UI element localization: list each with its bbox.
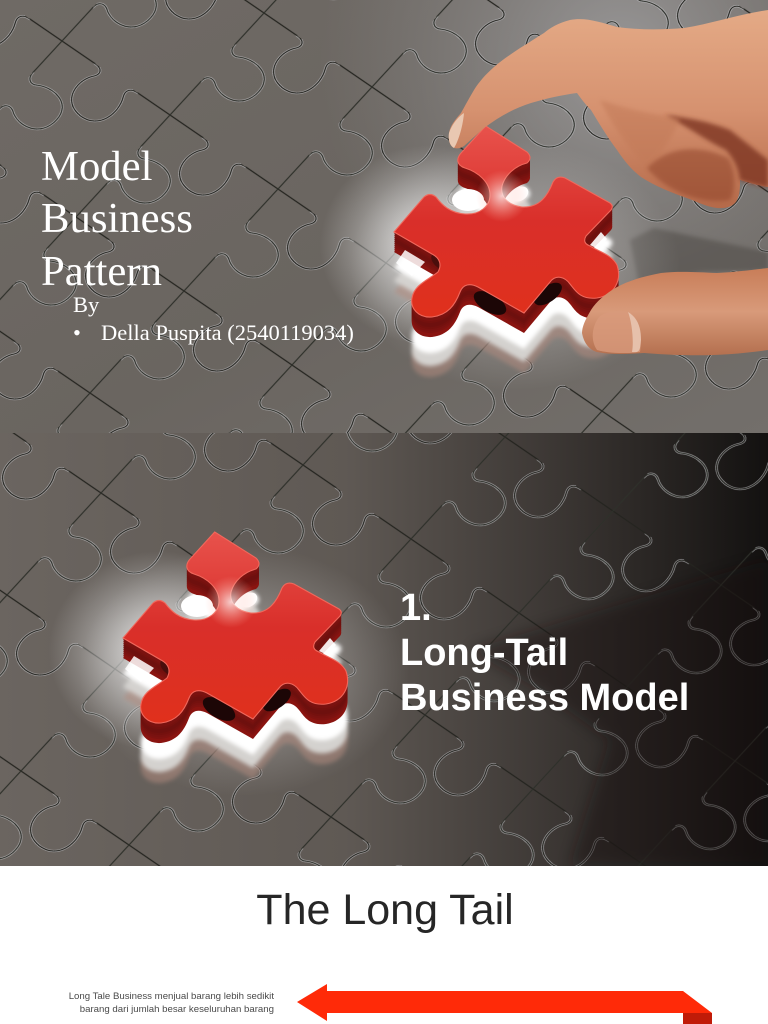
- top right light: [300, 0, 768, 433]
- title: The Long Tail: The Long Tail: [256, 886, 514, 934]
- dark shadow lower right: [470, 560, 768, 866]
- slide 2 background: [0, 433, 768, 866]
- panel: slide 3 The Long Tail: [0, 866, 768, 1024]
- icon: upper hand with finger: [449, 10, 768, 208]
- panel: slide 1 cover: [0, 0, 768, 433]
- heading: Long-Tail Business Model: Business Model: [400, 677, 689, 719]
- fingernail: [449, 113, 464, 148]
- description text: Long Tale Business menjual barang lebih sedikit: [69, 991, 274, 1002]
- title: Model Business Pattern: Pattern: [41, 248, 162, 295]
- title: Model Business Pattern: Model: [41, 143, 152, 190]
- puzzle lines slide 1: [0, 0, 768, 433]
- panel: slide 2 section heading: [0, 433, 768, 866]
- puzzle lines slide 2: [0, 433, 768, 866]
- thumbnail: [593, 311, 641, 353]
- byline: •: [73, 320, 81, 345]
- description text: barang dari jumlah besar keseluruhan barang: [80, 1004, 274, 1015]
- slide 3 background: [0, 866, 768, 1024]
- byline: By: [73, 292, 100, 317]
- red puzzle piece held by hand: [320, 126, 680, 390]
- red puzzle piece: [49, 532, 409, 796]
- icon: thumb: [582, 268, 768, 355]
- title: Model Business Pattern: Business: [41, 195, 193, 242]
- byline: Della Puspita (2540119034): [101, 320, 354, 345]
- heading: Long-Tail Business Model: 1.: [400, 587, 432, 629]
- finger shadow crease: [665, 115, 768, 187]
- slide 1 background: [0, 0, 768, 433]
- heading: Long-Tail Business Model: Long-Tail: [400, 632, 568, 674]
- cast shadow below hand: [630, 228, 768, 290]
- arrow: red long tail arrow: [297, 984, 712, 1024]
